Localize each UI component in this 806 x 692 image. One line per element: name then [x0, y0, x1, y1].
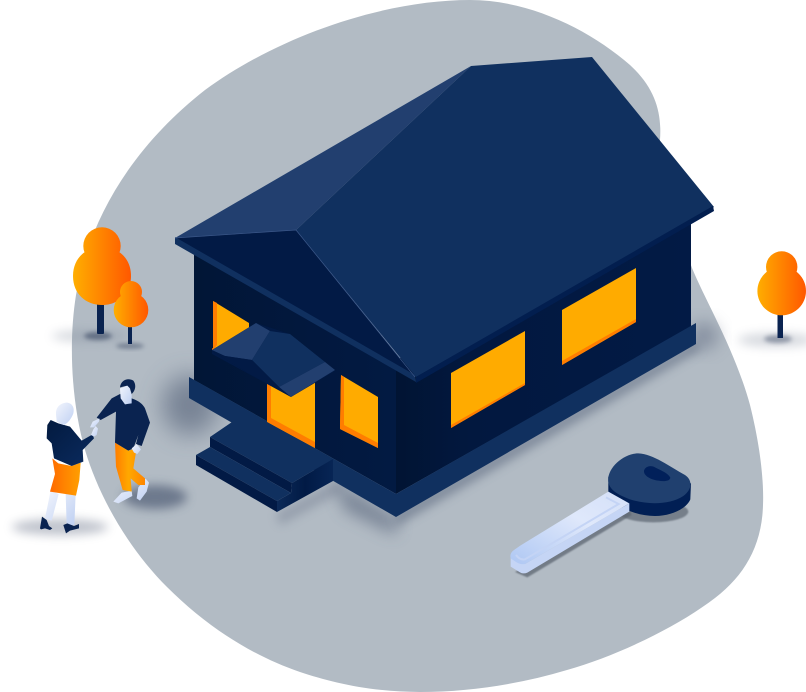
woman skirt: [50, 458, 81, 496]
left window: [212, 301, 249, 373]
woman: [40, 403, 98, 533]
side window: [340, 375, 378, 448]
man sweater: [97, 394, 150, 451]
man trousers: [115, 443, 145, 492]
man head: [120, 385, 132, 404]
base right: [396, 323, 696, 517]
man right hand: [132, 444, 141, 454]
base left: [189, 377, 396, 517]
key blade shadow: [515, 511, 632, 577]
ridge line: [175, 230, 415, 377]
roof main slope: [296, 57, 714, 377]
key blade edge: [511, 503, 629, 573]
man shoes: [113, 479, 149, 503]
house: [175, 57, 714, 517]
upper step top: [210, 422, 333, 483]
step side: [277, 459, 333, 512]
left eave: [175, 237, 416, 382]
door: [267, 375, 315, 448]
woman shoe left: [40, 517, 52, 530]
woman legs: [45, 491, 76, 525]
small tree: [114, 281, 148, 344]
key head side: [608, 477, 691, 516]
right tree: [757, 251, 806, 338]
woman hand: [91, 426, 98, 437]
key groove: [516, 497, 619, 559]
man left hand: [90, 418, 99, 427]
window right 2: [562, 268, 636, 365]
roof gable: [175, 230, 415, 381]
right wall: [396, 215, 691, 494]
steps: [196, 422, 333, 512]
roof hip slope: [175, 66, 471, 238]
key head shadow: [618, 501, 688, 522]
left wall: [194, 245, 396, 494]
window right 1: [451, 331, 525, 428]
roof: [175, 57, 714, 383]
key blade: [510, 492, 629, 564]
big tree: [73, 227, 131, 334]
lower step riser: [196, 455, 277, 512]
awning: [212, 323, 335, 397]
woman top: [47, 420, 94, 466]
man hair: [120, 379, 135, 394]
lower step top: [196, 447, 291, 501]
upper step riser: [210, 437, 292, 493]
woman head: [56, 403, 74, 425]
man: [90, 379, 150, 503]
key: [510, 453, 691, 577]
right eave: [416, 206, 714, 383]
ground shadows: [12, 322, 806, 535]
key hole: [644, 466, 670, 481]
woman shoe right: [63, 523, 79, 533]
key head top: [608, 453, 690, 503]
